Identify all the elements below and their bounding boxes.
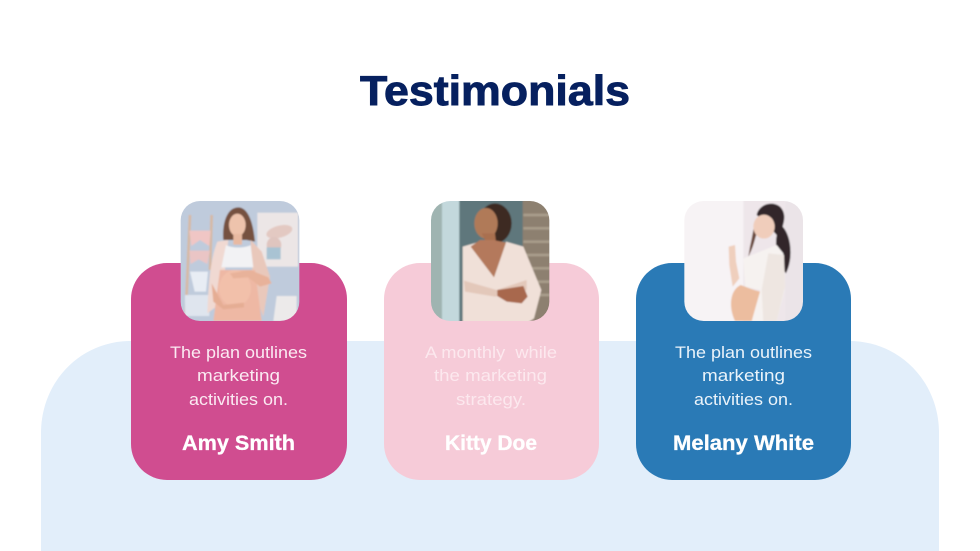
name: Kitty Doe: Kitty Doe [445, 432, 537, 455]
card: Amy Smith [131, 197, 347, 480]
quote: Melany White [675, 343, 812, 409]
quote: Amy Smith [170, 343, 307, 409]
quote: Amy Smith: activities on. [189, 390, 288, 409]
quote: Amy Smith: The plan outlines [170, 343, 307, 362]
quote: Melany White: marketing [702, 366, 785, 385]
quote: Melany White: The plan outlines [675, 343, 812, 362]
name: Melany White: Melany White [673, 432, 814, 455]
quote: Amy Smith: marketing [197, 366, 280, 385]
title: Testimonials [360, 67, 630, 114]
quote: Melany White: activities on. [694, 390, 793, 409]
testimonials slide [41, 74, 939, 551]
quote: Kitty Doe: strategy. [456, 390, 526, 409]
quote: Kitty Doe [425, 343, 557, 409]
quote: Kitty Doe: A monthly while [425, 343, 557, 362]
photo: Kitty Doe [431, 201, 550, 321]
card: Melany White [636, 197, 851, 480]
name: Amy Smith: Amy Smith [182, 432, 295, 455]
card: Kitty Doe [384, 197, 599, 480]
photo: Amy Smith [180, 201, 300, 321]
quote: Kitty Doe: the marketing [434, 366, 547, 385]
background panel [41, 341, 939, 551]
photo: Melany White [684, 201, 803, 321]
